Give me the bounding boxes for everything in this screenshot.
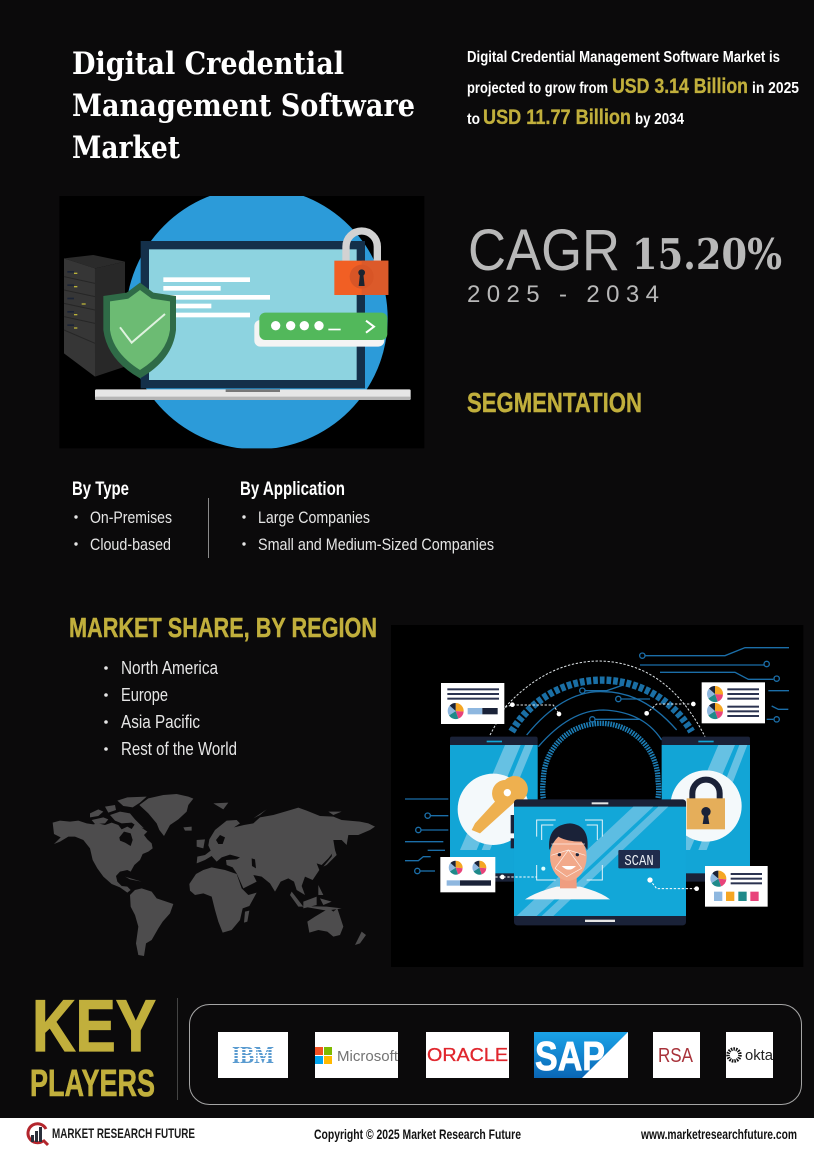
key players heading: KEY xyxy=(32,986,156,1067)
CAGR heading xyxy=(467,218,782,308)
logo: RSA xyxy=(653,1032,700,1078)
scan brackets xyxy=(537,820,602,880)
logo: Microsoft: Microsoft xyxy=(337,1048,399,1065)
region list xyxy=(104,658,237,759)
card: bottom right xyxy=(705,866,768,907)
market share heading: MARKET SHARE, BY REGION xyxy=(69,612,377,643)
illustration: laptop security xyxy=(59,187,424,449)
logo: Oracle: ORACLE xyxy=(427,1045,508,1065)
south america xyxy=(130,888,173,956)
logo: Oracle xyxy=(426,1032,509,1078)
key players panel xyxy=(190,1004,802,1104)
card: bottom left xyxy=(440,857,495,892)
logo: RSA: RSA xyxy=(658,1045,694,1067)
north america xyxy=(53,821,153,893)
water cutouts xyxy=(119,832,256,868)
segment list: by application: By Application xyxy=(240,479,345,500)
scan label xyxy=(618,850,660,870)
icon: padlock xyxy=(334,231,388,295)
title: Digital Credential xyxy=(72,46,344,82)
segment list: by application: Large Companies xyxy=(258,508,370,527)
key players heading: PLAYERS xyxy=(30,1063,155,1105)
scan label: SCAN xyxy=(624,854,654,870)
card: top right xyxy=(702,682,765,723)
region list: North America xyxy=(121,658,219,678)
market projection text: USD 3.14 Billion xyxy=(612,75,748,98)
footer xyxy=(0,1118,814,1150)
right tablet xyxy=(662,737,750,882)
icon: server rack xyxy=(64,255,125,377)
central laptop with face scan xyxy=(495,799,699,925)
market projection text: to xyxy=(467,111,480,128)
logo: IBM xyxy=(218,1032,288,1078)
region list: Rest of the World xyxy=(121,739,237,759)
CAGR heading: 2025 - 2034 xyxy=(467,281,659,308)
face xyxy=(525,887,610,899)
eurasia xyxy=(197,808,375,895)
segment list: by type: Cloud-based xyxy=(90,535,171,554)
world map xyxy=(53,794,375,956)
region list: Europe xyxy=(121,685,168,705)
illustration: biometric scan devices xyxy=(391,625,803,967)
laptop xyxy=(95,241,411,400)
islands xyxy=(125,803,366,945)
card: top left xyxy=(441,683,504,724)
left tablet xyxy=(450,737,538,882)
logo: Okta xyxy=(726,1032,774,1078)
market projection text: by 2034 xyxy=(635,111,684,128)
password field xyxy=(254,313,387,347)
segment list: by type xyxy=(72,479,172,554)
logo: Microsoft xyxy=(315,1032,399,1078)
CAGR heading: CAGR xyxy=(468,218,620,283)
logo: market research future xyxy=(28,1124,195,1145)
arctic islands xyxy=(90,797,147,828)
market projection text: USD 11.77 Billion xyxy=(483,106,631,129)
title: Market xyxy=(72,130,181,166)
segment list: by application xyxy=(240,479,494,554)
logo: market research future: MARKET RESEARCH FUTURE xyxy=(52,1125,195,1141)
region list: Asia Pacific xyxy=(121,712,200,732)
title xyxy=(72,46,415,166)
africa xyxy=(189,867,257,933)
segment list: by type: On-Premises xyxy=(90,508,172,527)
copyright: Copyright © 2025 Market Research Future xyxy=(314,1126,521,1142)
segment list: by type: By Type xyxy=(72,479,129,500)
segmentation heading: SEGMENTATION xyxy=(467,387,642,418)
greenland xyxy=(139,794,193,836)
segment list: by application: Small and Medium-Sized Companies xyxy=(258,535,494,554)
logo: IBM: IBM xyxy=(232,1043,274,1069)
scanner arcs xyxy=(490,661,705,798)
logo: Okta: okta xyxy=(745,1047,774,1064)
circuit lines xyxy=(405,648,789,874)
market projection text xyxy=(467,49,799,129)
market projection text: projected to grow from xyxy=(467,80,608,97)
logo: SAP: SAP xyxy=(535,1033,605,1079)
key players heading xyxy=(30,986,156,1105)
market projection text: in 2025 xyxy=(752,80,799,97)
CAGR heading: 15.20% xyxy=(632,230,782,279)
title: Management Software xyxy=(72,88,415,124)
icon: shield xyxy=(103,283,176,378)
